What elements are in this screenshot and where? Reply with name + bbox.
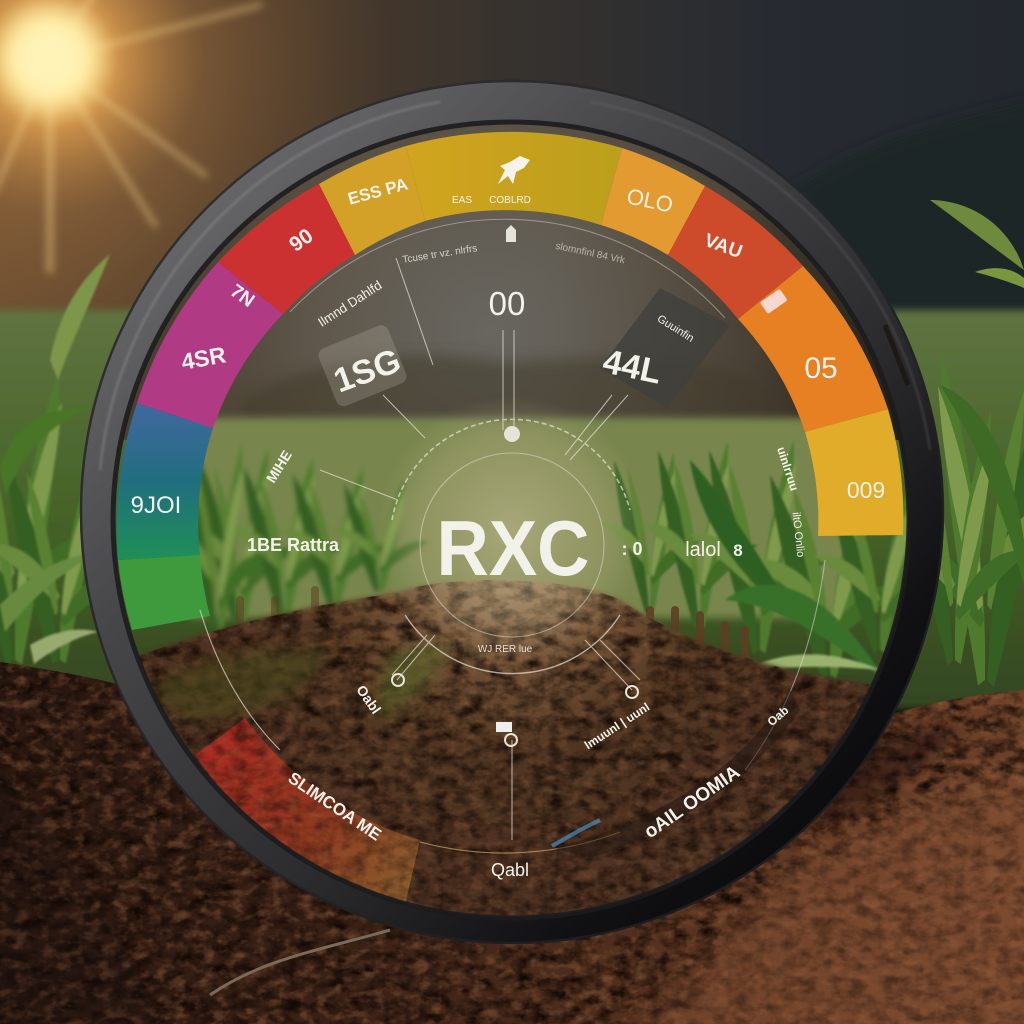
colored band: orange segment (601, 148, 705, 255)
label: magenta small: 7N (226, 281, 258, 312)
colored band: red segment (218, 184, 355, 314)
central haze (377, 395, 647, 665)
label: small vertical left: MIHE (263, 447, 295, 486)
dark glass strip bottom right (555, 690, 800, 858)
label: lower right strip: lmuunl | uunl (582, 700, 652, 752)
lens right corn (603, 441, 906, 678)
label: yellow: 009 (847, 477, 885, 503)
colored band: red-orange segment (668, 186, 803, 319)
small text: top arc right: slomnfinl 84 Vrk (554, 241, 627, 266)
label: right dots: : 0 (621, 539, 643, 559)
right corn plants outside the dial (881, 200, 1024, 688)
top marker (506, 225, 516, 242)
colored band: bright orange segment (738, 266, 888, 432)
logo: center letters: RXC (436, 504, 590, 592)
dial guide lines (200, 219, 825, 853)
soil texture (140, 580, 870, 916)
label: lower right long: oAIL OOMIA (641, 762, 744, 843)
label: right vertical text: uinlrruu (774, 445, 801, 492)
small text: card right: Guuinfin (655, 313, 696, 345)
label: top yellow: COBLRD (489, 195, 531, 206)
label: magenta: 4SR (179, 341, 228, 375)
lens dark right side (691, 210, 898, 440)
label: bright orange: 05 (804, 352, 838, 385)
band labels (131, 156, 885, 519)
metal outer ring (80, 80, 944, 944)
label: red: 90 (285, 224, 317, 257)
distant tree line (700, 95, 1024, 340)
small text: top arc left: Ilmnd Dahlfd (315, 277, 384, 330)
corn stems (240, 590, 745, 672)
top icon: animal (498, 156, 530, 184)
colored band: green segment (118, 555, 210, 630)
label: top yellow left: EAS (452, 195, 472, 206)
label: right icon: 8 (733, 541, 743, 560)
left corn plants outside the dial (0, 254, 134, 667)
label: lower red band: SLIMCOA ME (285, 768, 385, 844)
lower red soil band (195, 718, 420, 902)
label: lower left tag: Oabl (353, 682, 384, 717)
lower square marker (496, 722, 512, 732)
lens distant hill (242, 351, 728, 418)
foreground soil outside dial (0, 640, 1024, 1024)
readout card right (600, 288, 730, 408)
label: lower center: Qabl (491, 860, 529, 880)
central dial numbers (247, 241, 806, 880)
label: right vertical text 2: iltO Onlio (790, 512, 806, 558)
lower markers (392, 674, 638, 746)
label: green band: 9JOI (131, 492, 181, 519)
background sky (0, 0, 1024, 330)
gauge lens contents (116, 124, 906, 915)
lens left corn (198, 447, 428, 630)
lens background (110, 120, 920, 440)
background crop field (0, 310, 1024, 710)
glass strip color marks (552, 820, 600, 846)
label: right reading: lalol (685, 539, 721, 561)
colored band: magenta segment (137, 262, 283, 428)
label: red orange: VAU (701, 230, 745, 263)
number: right card: 44L (600, 342, 665, 392)
readout card left (318, 326, 406, 406)
sun with rays (0, 0, 460, 340)
label: lower dial: WJ RER lue (478, 644, 533, 655)
label: far right tag: Oab (765, 703, 791, 729)
small text: top arc: Tcuse tr vz. nlrfrs (402, 243, 478, 266)
colored band: top yellow segment (406, 132, 622, 225)
colored band: blue segment (117, 403, 213, 560)
colored band: gold segment (319, 146, 425, 255)
label: orange: OLO (625, 183, 675, 218)
number: top reading: 00 (489, 285, 525, 322)
number: left card: 1SG (329, 341, 406, 400)
label: gold: ESS PA (346, 174, 410, 209)
label: upper orange mark (760, 289, 788, 314)
lens field band (190, 418, 850, 618)
colored band: yellow segment (805, 409, 903, 536)
label: left reading: 1BE Rattra (247, 535, 340, 555)
dial hub tick marker (504, 426, 520, 442)
lens soil (139, 580, 871, 916)
